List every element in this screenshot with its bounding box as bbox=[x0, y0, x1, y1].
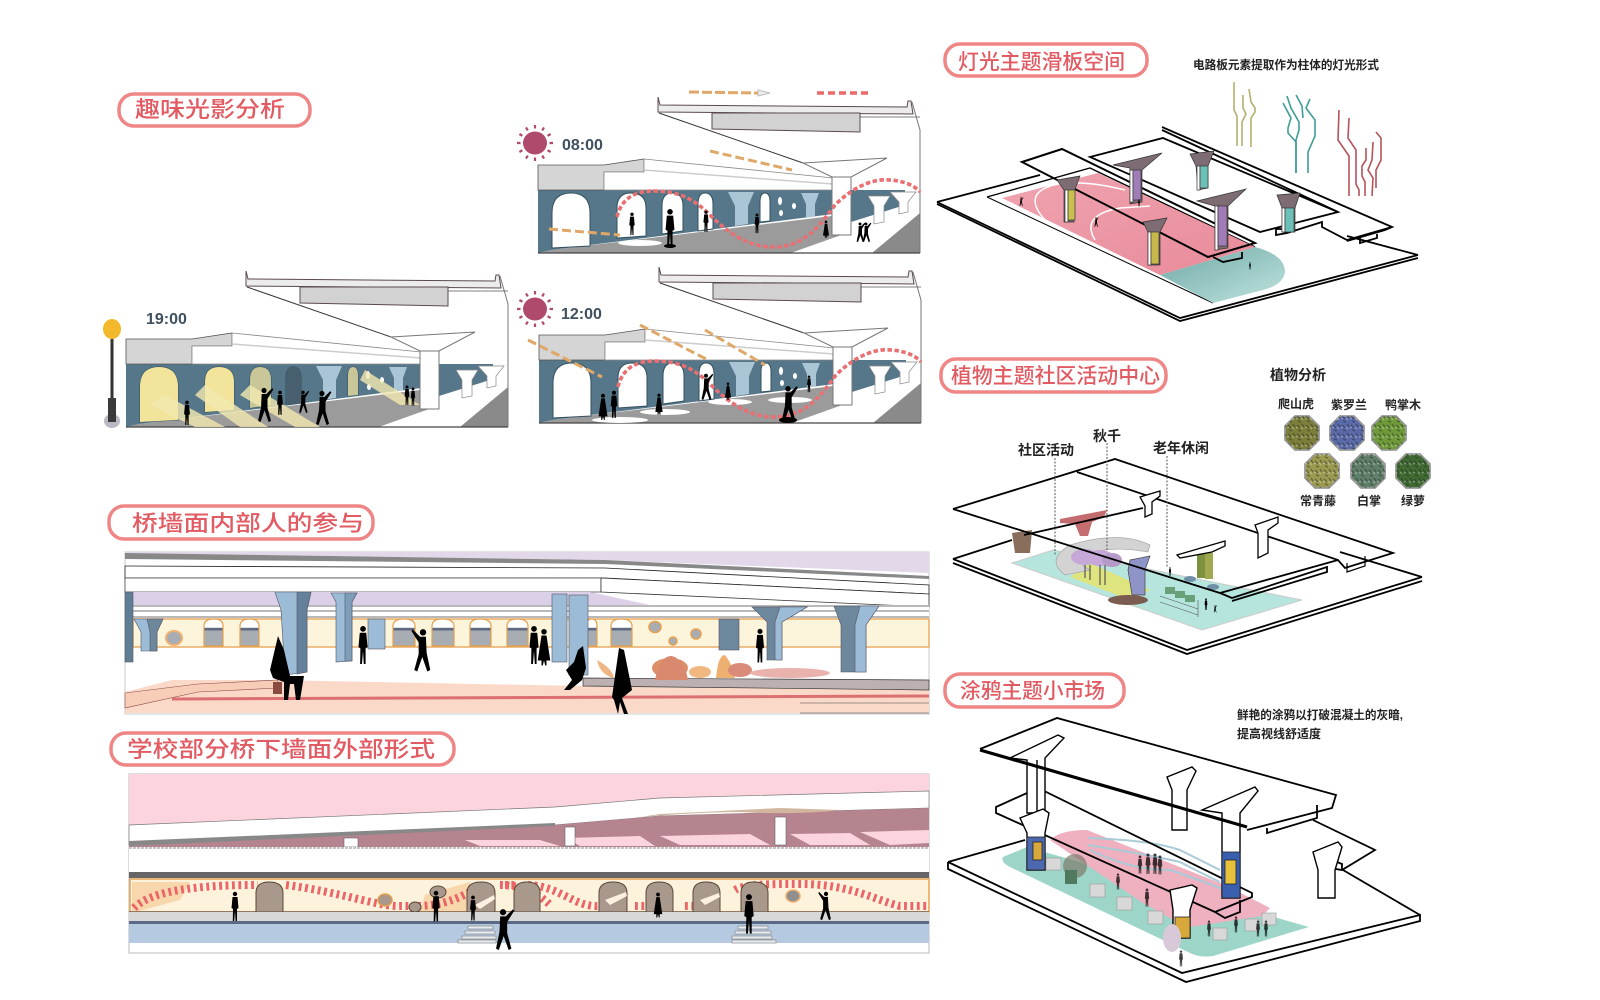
decks bbox=[996, 788, 1375, 918]
time label: 12:00 bbox=[561, 306, 602, 323]
caption: graffiti: 鲜艳的涂鸦以打破混凝土的灰暗, bbox=[1237, 707, 1403, 722]
time label: 08:00 bbox=[562, 137, 603, 154]
icon: street lamp bbox=[103, 319, 121, 428]
heading: plant analysis: 植物分析 bbox=[1270, 367, 1326, 383]
leader lines bbox=[1055, 443, 1167, 568]
heading: 趣味光影分析: 趣味光影分析 bbox=[135, 97, 285, 122]
pink ground bbox=[1050, 830, 1270, 927]
icon: circuit line patterns bbox=[1234, 82, 1381, 196]
heading: 学校部分桥下墙面外部形式: 学校部分桥下墙面外部形式 bbox=[127, 737, 435, 762]
plant names: 紫罗兰 bbox=[1331, 397, 1367, 412]
plant names: 绿萝 bbox=[1401, 493, 1425, 508]
heading: 桥墙面内部人的参与 bbox=[109, 506, 373, 539]
heading: 桥墙面内部人的参与: 桥墙面内部人的参与 bbox=[132, 511, 364, 536]
pillars bbox=[1010, 735, 1342, 938]
trees, columns and planters bbox=[1012, 510, 1219, 617]
heading: 灯光主题滑板空间: 灯光主题滑板空间 bbox=[958, 51, 1125, 74]
teal activity ground bbox=[1012, 550, 1302, 630]
pink skate floor bbox=[1002, 173, 1255, 275]
heading: 灯光主题滑板空间 bbox=[945, 44, 1147, 76]
legend: light path and red dashes bbox=[689, 90, 872, 96]
light path dashes bbox=[528, 325, 765, 377]
pink dashed wave mural bbox=[134, 884, 927, 908]
people silhouettes bbox=[232, 891, 831, 950]
plant names: 常青藤 bbox=[1300, 493, 1336, 508]
plant names bbox=[1278, 396, 1425, 508]
wave dashes bbox=[617, 180, 920, 247]
railing bbox=[1088, 838, 1225, 890]
panel: bridge interior elevation bbox=[125, 552, 929, 714]
caption: circuit board light: 电路板元素提取作为柱体的灯光形式 bbox=[1193, 57, 1379, 72]
labels: 社区活动 bbox=[1018, 442, 1074, 458]
plant names: 鸭掌木 bbox=[1385, 397, 1421, 412]
teal ground bbox=[1002, 847, 1309, 957]
walkway and canal bbox=[129, 912, 929, 943]
upper deck bbox=[980, 718, 1336, 833]
heading: 植物主题社区活动中心: 植物主题社区活动中心 bbox=[951, 365, 1160, 388]
teal pool bbox=[1160, 247, 1285, 303]
heading: 趣味光影分析 bbox=[119, 94, 310, 126]
axonometric: skate space bbox=[937, 127, 1418, 321]
light path dashes bbox=[549, 151, 792, 235]
labels bbox=[1018, 428, 1209, 458]
deck outline and pillars bbox=[953, 459, 1393, 601]
decks bbox=[1022, 149, 1255, 257]
caption: graffiti bbox=[1237, 707, 1403, 741]
blue pillars bbox=[125, 592, 879, 675]
arches bbox=[256, 882, 768, 912]
market stalls bbox=[1046, 858, 1276, 940]
pink floor and bench bbox=[125, 678, 929, 713]
people silhouettes bbox=[629, 209, 871, 248]
labels: 秋千 bbox=[1093, 428, 1121, 444]
plants bbox=[597, 655, 830, 680]
scene: 08:00 sunlight bbox=[517, 97, 920, 253]
people silhouettes bbox=[184, 386, 415, 425]
labels: 老年休闲 bbox=[1153, 440, 1209, 456]
panel: school-side exterior wall bbox=[129, 774, 929, 953]
people silhouettes bbox=[270, 626, 764, 714]
heading: 植物主题社区活动中心 bbox=[941, 359, 1166, 392]
plant texture bbox=[1285, 416, 1430, 488]
caption: graffiti: 提高视线舒适度 bbox=[1237, 726, 1321, 741]
scene: 19:00 night lighting bbox=[103, 271, 508, 428]
skaters bbox=[1020, 197, 1251, 270]
icon: sun bbox=[517, 125, 553, 161]
heading: 涂鸦主题小市场: 涂鸦主题小市场 bbox=[960, 680, 1105, 703]
axonometric: graffiti market bbox=[948, 718, 1420, 982]
pillars bbox=[1057, 151, 1300, 265]
wave dashes bbox=[618, 350, 921, 417]
time label: 19:00 bbox=[146, 311, 187, 328]
plant swatches bbox=[1285, 416, 1430, 488]
plant names: 爬山虎 bbox=[1278, 396, 1314, 411]
plant names: 白掌 bbox=[1357, 493, 1381, 508]
graffiti panels bbox=[1027, 837, 1240, 952]
icon: sun bbox=[517, 291, 553, 327]
scene: 12:00 sunlight bbox=[517, 267, 921, 423]
cream wall bbox=[130, 879, 929, 912]
heading: 学校部分桥下墙面外部形式 bbox=[111, 733, 454, 765]
cream wall with arches bbox=[133, 619, 929, 647]
people bbox=[1063, 854, 1268, 966]
axonometric: plant community center bbox=[953, 428, 1422, 654]
heading: 涂鸦主题小市场 bbox=[945, 674, 1124, 707]
plant analysis bbox=[1270, 367, 1430, 508]
people silhouettes bbox=[598, 374, 811, 423]
yellow lit arches and floor beams bbox=[140, 367, 420, 427]
